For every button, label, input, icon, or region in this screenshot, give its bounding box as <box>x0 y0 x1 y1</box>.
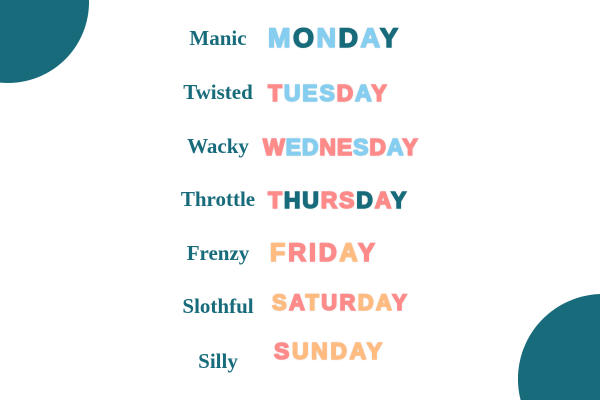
word: TUESDAY: TUESDAY <box>268 80 388 106</box>
label: Wacky: Wacky <box>187 134 249 158</box>
word: SUNDAY: SUNDAY <box>274 338 385 364</box>
label: Throttle: Throttle <box>181 187 255 211</box>
label: Frenzy: Frenzy <box>187 241 249 265</box>
label: Slothful: Slothful <box>182 294 254 318</box>
label: Silly: Silly <box>198 349 238 373</box>
word: FRIDAY: FRIDAY <box>270 239 378 267</box>
word: THURSDAY: THURSDAY <box>268 187 408 213</box>
word: SATURDAY: SATURDAY <box>272 290 409 315</box>
word: WEDNESDAY: WEDNESDAY <box>263 134 419 160</box>
label: Twisted: Twisted <box>183 80 253 104</box>
label: Manic: Manic <box>189 26 247 50</box>
word: MONDAY: MONDAY <box>268 23 401 53</box>
